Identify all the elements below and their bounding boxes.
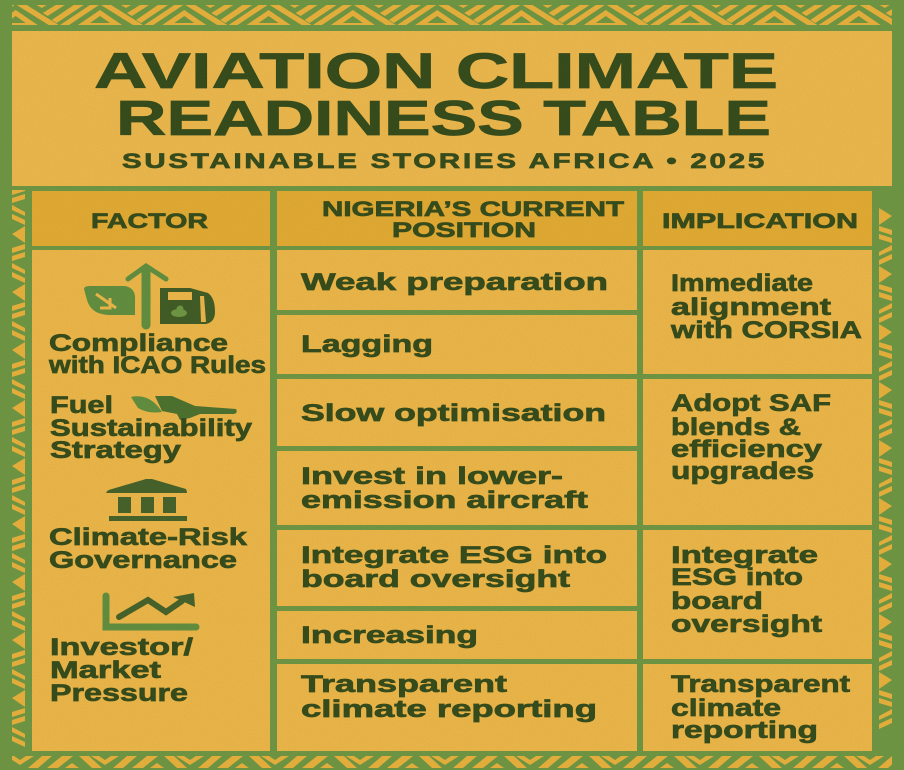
subtitle: SUSTAINABLE STORIES AFRICA • 2025 (122, 150, 767, 173)
row: adopt SAF: efficiency (671, 436, 823, 463)
icon: leaf, arrow and fuel pump (84, 266, 215, 325)
row: transparent reporting (643, 664, 872, 751)
label: climate risk: Governance (49, 547, 237, 574)
row: adopt SAF: upgrades (671, 458, 814, 485)
row: integrate ESG: board (671, 588, 763, 615)
icon: rising line chart (106, 593, 196, 627)
row: increasing (277, 611, 637, 659)
title: READINESS TABLE (116, 92, 771, 146)
header: implication (643, 191, 872, 246)
row: transparent reporting: reporting (671, 717, 818, 744)
top pattern border (0, 5, 904, 25)
icon: plane with leaf (131, 396, 237, 420)
row: invest in aircraft: Invest in lower- (301, 463, 563, 490)
row: adopt SAF: blends & (671, 414, 801, 441)
row: integrate ESG: oversight (671, 611, 822, 638)
label: investor pressure: Pressure (50, 680, 188, 707)
row: weak preparation: Weak preparation (301, 269, 608, 296)
label: fuel sustainability (50, 392, 253, 464)
label: compliance: with ICAO Rules (48, 352, 266, 379)
header: factor: FACTOR (91, 210, 208, 233)
label: fuel sustainability: Fuel (50, 392, 113, 419)
row: integrate ESG (643, 530, 872, 659)
label: compliance: Compliance (49, 330, 228, 357)
header: implication: IMPLICATION (662, 210, 858, 233)
bottom pattern border (6, 756, 904, 768)
panel: position column (277, 250, 637, 751)
title (94, 43, 778, 146)
row: transparent reporting: climate reporting (301, 696, 597, 723)
row: integrate ESG: Integrate (671, 542, 818, 569)
row: transparent reporting: Transparent (301, 671, 507, 698)
label: compliance (48, 330, 266, 379)
row: increasing: Increasing (301, 622, 478, 649)
label: investor pressure (50, 634, 193, 707)
panel: factor column (32, 250, 270, 751)
row: transparent reporting: climate (671, 695, 781, 722)
row: adopt SAF: Adopt SAF (671, 390, 831, 417)
label: climate risk (49, 524, 248, 574)
header: factor (32, 191, 270, 246)
left pattern border (12, 168, 25, 747)
row: adopt SAF (643, 379, 872, 525)
panel: implication column (643, 250, 872, 751)
row: CORSIA alignment (643, 250, 872, 374)
label: fuel sustainability: Strategy (50, 437, 182, 464)
row: invest in aircraft: emission aircraft (301, 487, 588, 514)
row: CORSIA alignment: alignment (671, 294, 831, 321)
row: CORSIA alignment: with CORSIA (670, 317, 862, 344)
header: Nigeria's current position: NIGERIA’S CURRENT (322, 198, 624, 221)
title: AVIATION CLIMATE (94, 43, 778, 99)
label: investor pressure: Investor/ (50, 634, 193, 661)
row: integrate ESG: board oversight (301, 566, 570, 593)
row: integrate ESG (277, 530, 637, 606)
row: invest in aircraft (277, 451, 637, 525)
row: integrate ESG: ESG into (671, 564, 803, 591)
panel: title banner (12, 31, 892, 186)
row: CORSIA alignment: Immediate (671, 270, 813, 297)
label: fuel sustainability: Sustainability (50, 415, 253, 442)
row: slow optimisation: Slow optimisation (301, 400, 606, 427)
row: slow optimisation (277, 379, 637, 446)
row: lagging (277, 315, 637, 374)
label: investor pressure: Market (50, 657, 161, 684)
header: Nigeria's current position: POSITION (392, 219, 536, 242)
row: integrate ESG: Integrate ESG into (301, 542, 607, 569)
row: transparent reporting (277, 664, 637, 751)
right pattern border (879, 208, 892, 729)
row: weak preparation (277, 250, 637, 310)
label: climate risk: Climate-Risk (49, 524, 248, 551)
icon: institution building (106, 479, 187, 521)
row: transparent reporting: Transparent (671, 671, 850, 698)
header: Nigeria's current position (277, 191, 637, 246)
row: lagging: Lagging (301, 331, 433, 358)
panel: table header (32, 191, 872, 246)
